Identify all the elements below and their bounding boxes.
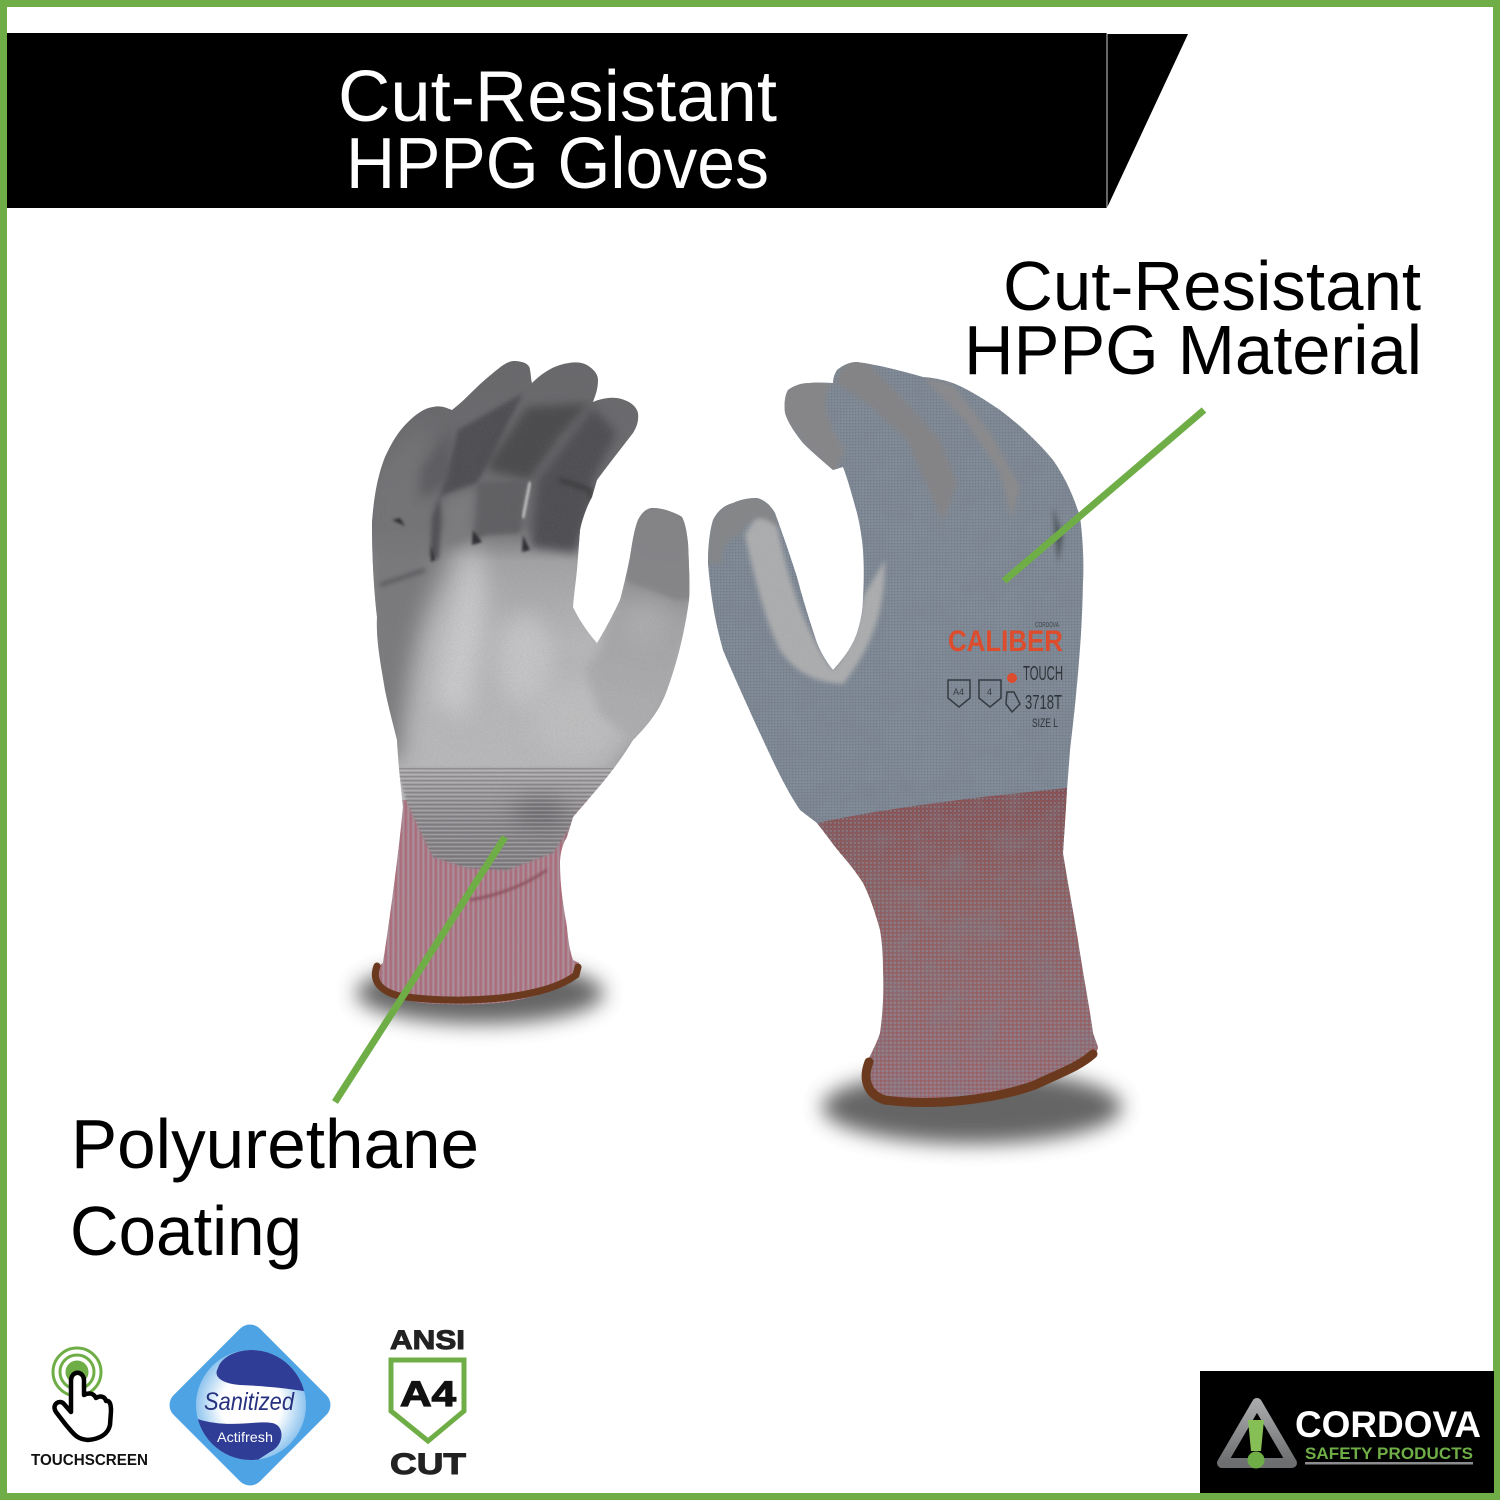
underline	[1305, 1462, 1473, 1464]
label text: Cut-Resistant	[1003, 247, 1421, 325]
title	[338, 57, 777, 204]
printed rating badges	[948, 673, 1020, 712]
shield	[391, 1360, 464, 1441]
arrow line	[335, 837, 505, 1102]
left glove cuff hem	[375, 966, 578, 1000]
banner shape	[7, 33, 1188, 208]
label text	[70, 1105, 479, 1270]
right glove cuff hem	[866, 1054, 1093, 1102]
Sanitized wordmark: Sanitized	[204, 1388, 295, 1416]
touchscreen label: TOUCHSCREEN	[31, 1452, 148, 1469]
CUT: CUT	[390, 1448, 466, 1481]
right glove floor shadow	[822, 1070, 1122, 1144]
ANSI: ANSI	[390, 1325, 465, 1355]
CORDOVA: CORDOVA	[1295, 1404, 1481, 1445]
warning triangle	[1222, 1403, 1292, 1463]
badge letters: A4	[953, 687, 964, 697]
logo panel	[1200, 1371, 1494, 1493]
diamond	[164, 1319, 336, 1491]
fingertip coating patches	[708, 360, 1063, 684]
callout label: material	[964, 247, 1422, 581]
label text: Coating	[70, 1192, 302, 1270]
right glove body	[708, 362, 1098, 1098]
brand name: CALIBER	[948, 625, 1063, 658]
title: Cut-Resistant	[338, 57, 777, 137]
badge letters	[953, 687, 992, 697]
label text: Polyurethane	[71, 1105, 479, 1183]
swirl circle	[196, 1350, 306, 1460]
left glove floor shadow	[356, 962, 604, 1024]
right glove brand print	[948, 622, 1063, 730]
touch rings	[53, 1348, 101, 1396]
left glove body	[360, 350, 700, 1010]
exclamation mark	[1248, 1420, 1264, 1451]
maker line: CORDOVA	[1035, 622, 1059, 629]
label text	[964, 247, 1422, 389]
logo: Cordova Safety Products	[1200, 1371, 1494, 1493]
title: HPPG Gloves	[346, 124, 769, 204]
label text: HPPG Material	[964, 311, 1422, 389]
arrow line	[1004, 410, 1204, 581]
left glove: palm side	[356, 350, 700, 1024]
right glove: back side	[700, 350, 1130, 1144]
A4: A4	[400, 1375, 457, 1414]
badge letters: 4	[987, 687, 992, 697]
SAFETY PRODUCTS: SAFETY PRODUCTS	[1305, 1444, 1473, 1463]
model text: SIZE L	[1032, 716, 1058, 730]
title banner	[7, 33, 1188, 208]
model text: 3718T	[1025, 692, 1062, 714]
model text: TOUCH	[1023, 663, 1063, 685]
pointing hand	[55, 1373, 111, 1440]
Actifresh wordmark: Actifresh	[217, 1429, 273, 1445]
icon: Sanitized Actifresh badge	[170, 1324, 330, 1486]
icon: ANSI A4 cut badge	[390, 1325, 466, 1481]
model text	[1023, 663, 1063, 730]
callout label: coating	[70, 837, 505, 1270]
icon: touchscreen	[31, 1348, 148, 1469]
